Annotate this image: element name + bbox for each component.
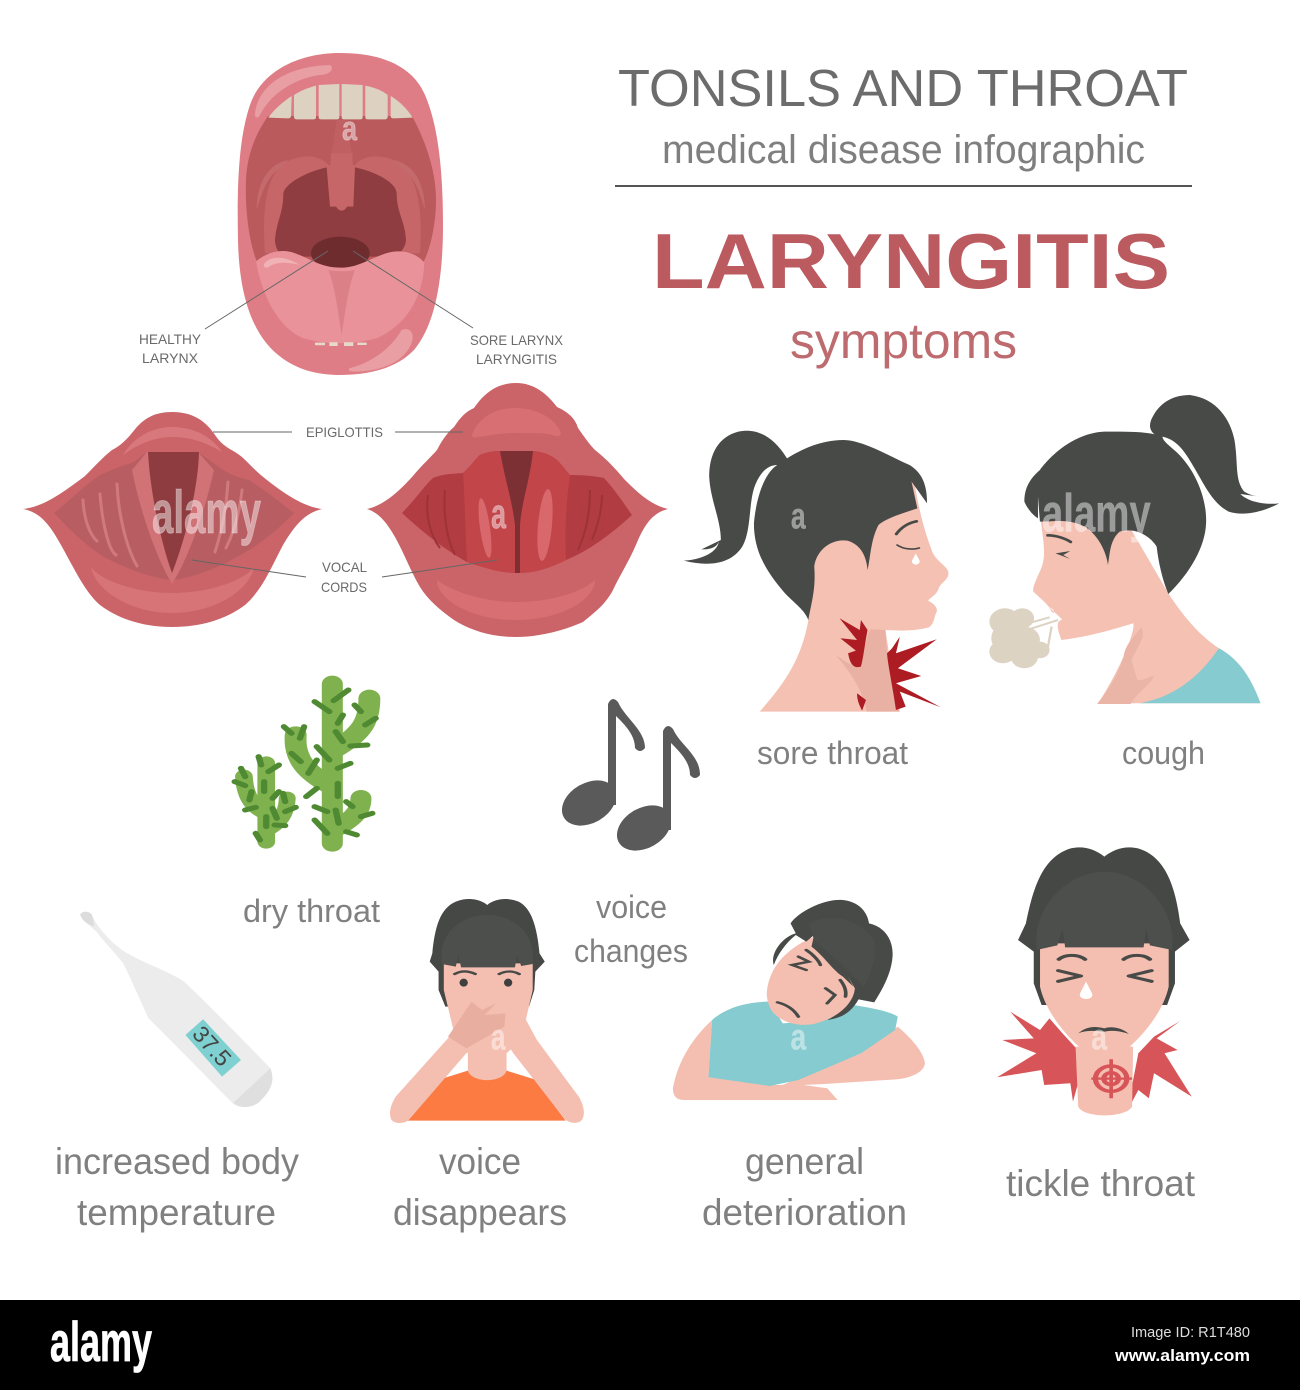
target mark on throat bbox=[1091, 1059, 1132, 1098]
label: tickle throat: tickle throat bbox=[1006, 1163, 1196, 1204]
label: increased body temperature bbox=[55, 1141, 299, 1233]
healthy larynx illustration: alamy bbox=[152, 479, 261, 546]
figure: coughing woman bbox=[989, 395, 1279, 704]
sore larynx illustration bbox=[367, 383, 668, 637]
figure: sore throat woman: a bbox=[791, 496, 806, 537]
footer band bbox=[0, 1300, 1300, 1390]
label: sore throat: sore throat bbox=[757, 735, 908, 771]
healthy larynx illustration bbox=[23, 412, 322, 627]
figure: tickle throat woman bbox=[997, 847, 1192, 1115]
label: increased body temperature: temperature bbox=[77, 1192, 276, 1233]
label: healthy larynx: LARYNX bbox=[142, 350, 199, 366]
sore larynx illustration: a bbox=[491, 490, 506, 537]
title: TONSILS AND THROAT bbox=[618, 60, 1188, 118]
label: cough: cough bbox=[1122, 735, 1205, 771]
teeth bbox=[268, 84, 413, 119]
label: vocal cords bbox=[192, 559, 497, 595]
label: general deterioration: general bbox=[745, 1141, 864, 1182]
label: voice changes: voice bbox=[596, 889, 667, 925]
subheading: symptoms: symptoms bbox=[790, 313, 1017, 369]
label: healthy larynx bbox=[139, 331, 202, 366]
icon: thermometer bbox=[80, 912, 272, 1107]
title: medical disease infographic bbox=[662, 128, 1145, 172]
figure: coughing woman: alamy bbox=[1042, 485, 1151, 544]
label: epiglottis: EPIGLOTTIS bbox=[306, 424, 383, 440]
cough cloud bbox=[989, 608, 1058, 668]
figure: general deterioration woman: a bbox=[791, 1017, 807, 1058]
label: general deterioration: deterioration bbox=[702, 1192, 907, 1233]
label: healthy larynx: HEALTHY bbox=[139, 331, 202, 347]
footer logo: alamy bbox=[50, 1310, 152, 1373]
heading: laryngitis: LARYNGITIS bbox=[652, 217, 1170, 305]
icon: music notes bbox=[554, 699, 700, 860]
label: vocal cords: CORDS bbox=[321, 579, 367, 595]
icon: cactus bbox=[235, 684, 376, 843]
figure: sore throat woman bbox=[684, 431, 948, 712]
figure: tickle throat woman: a bbox=[1091, 1017, 1108, 1058]
label: sore larynx laryngitis: LARYNGITIS bbox=[476, 351, 557, 367]
title bbox=[615, 60, 1192, 187]
label: voice changes: changes bbox=[574, 933, 688, 969]
website: www.alamy.com bbox=[1114, 1346, 1250, 1365]
leader lines: healthy and sore larynx bbox=[205, 251, 473, 329]
label: sore larynx laryngitis bbox=[470, 332, 564, 367]
open mouth illustration: a bbox=[342, 110, 358, 148]
label: sore larynx laryngitis: SORE LARYNX bbox=[470, 332, 564, 348]
thermometer reading: 37.5 bbox=[187, 1021, 237, 1071]
open mouth illustration bbox=[238, 53, 443, 375]
label: voice disappears: disappears bbox=[393, 1192, 567, 1233]
figure: general deterioration woman bbox=[673, 900, 925, 1100]
label: voice disappears bbox=[393, 1141, 567, 1233]
label: general deterioration bbox=[702, 1141, 907, 1233]
label: voice disappears: voice bbox=[439, 1141, 521, 1182]
figure: voice disappears woman: a bbox=[491, 1017, 506, 1058]
figure: voice disappears woman bbox=[390, 899, 584, 1123]
image id: Image ID: R1T480 bbox=[1131, 1324, 1250, 1341]
label: vocal cords: VOCAL bbox=[322, 559, 367, 575]
label: voice changes bbox=[574, 889, 688, 969]
label: dry throat: dry throat bbox=[243, 893, 380, 929]
label: increased body temperature: increased body bbox=[55, 1141, 299, 1182]
